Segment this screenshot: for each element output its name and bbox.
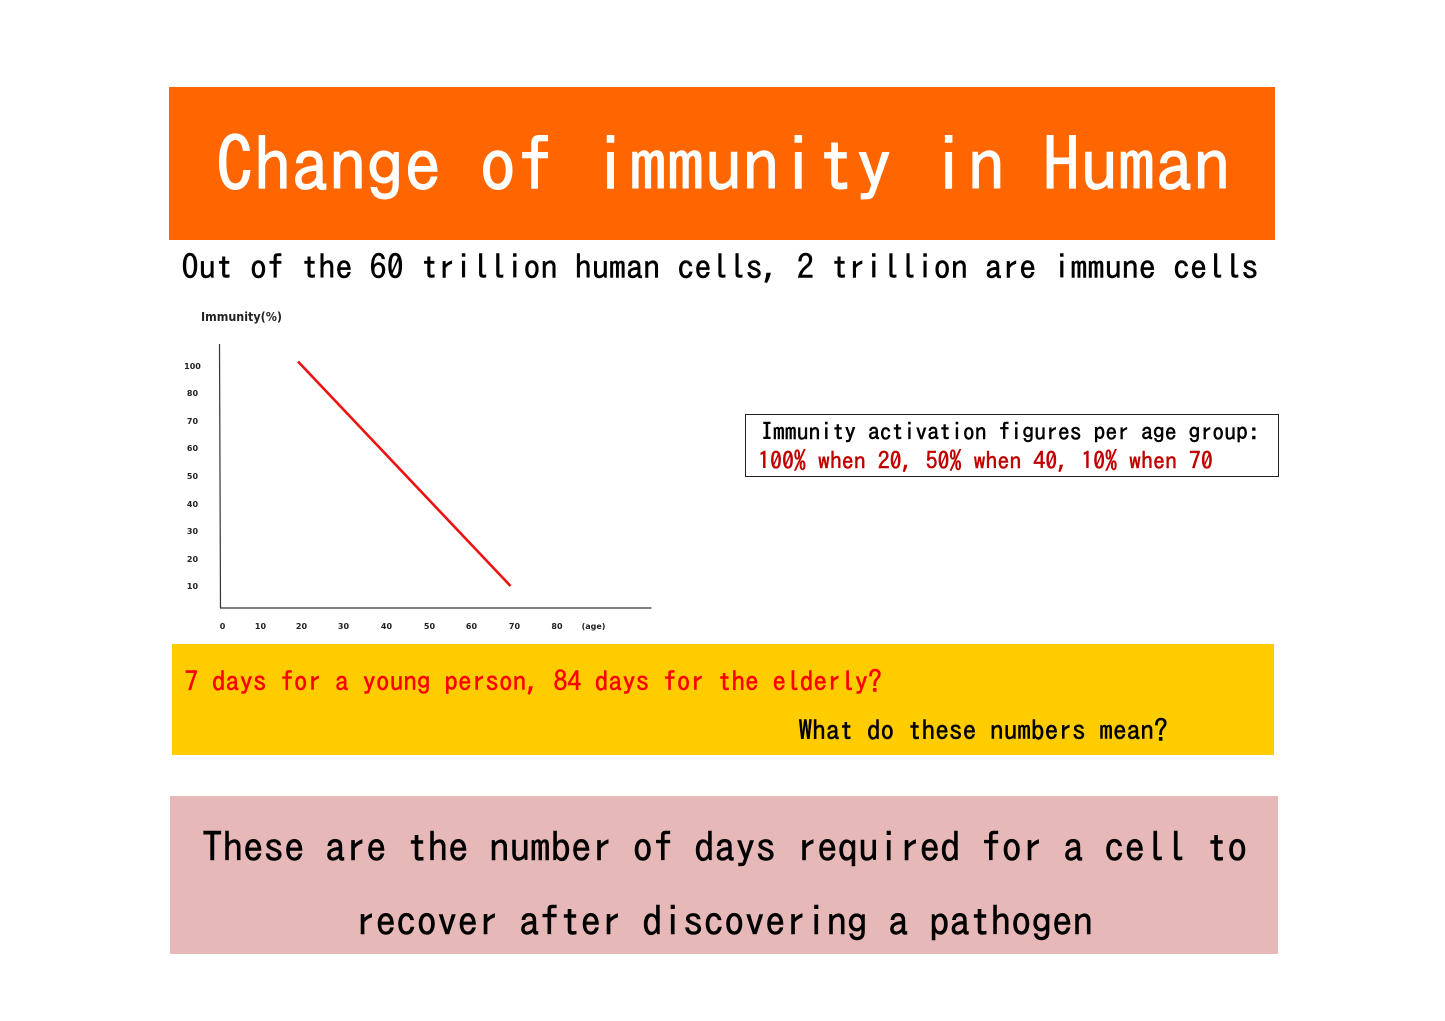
panel: answer xyxy=(170,796,1278,954)
question: black text: What do these numbers mean? xyxy=(798,717,1168,744)
immunity decline line xyxy=(298,362,510,586)
callout: immunity activation figures xyxy=(745,414,1279,477)
x axis labels: 40 xyxy=(381,622,392,631)
x axis labels: 10 xyxy=(255,622,266,631)
answer line one: These are the number of days required for a cell to xyxy=(202,826,1248,867)
question: red text: 7 days for a young person, 84 days for the elderly? xyxy=(184,668,882,695)
y axis labels: 10 xyxy=(187,582,198,591)
answer line two: recover after discovering a pathogen xyxy=(355,900,1093,941)
y axis labels: 100 xyxy=(184,362,201,371)
y axis labels: 60 xyxy=(187,444,198,453)
x axis labels: 20 xyxy=(296,622,307,631)
callout heading: Immunity activation figures per age group: xyxy=(761,419,1260,443)
title banner xyxy=(169,87,1275,240)
y axis labels: 70 xyxy=(187,417,198,426)
x axis labels: 30 xyxy=(338,622,349,631)
subtitle: immune cell count: Out of the 60 trillion human cells, 2 trillion are immune cells xyxy=(182,250,1258,284)
title: Change of immunity in Human xyxy=(216,127,1230,202)
panel: question xyxy=(172,644,1274,755)
x axis labels: 0 xyxy=(220,622,226,631)
y axis labels: 30 xyxy=(187,527,198,536)
x axis labels: 80 xyxy=(551,622,563,631)
y axis title: Immunity(%) xyxy=(201,309,282,324)
x axis labels: 70 xyxy=(509,622,520,631)
y axis labels: 80 xyxy=(187,389,198,398)
line chart: immunity by age xyxy=(184,309,652,631)
y axis labels: 50 xyxy=(187,472,198,481)
x axis labels: (age) xyxy=(582,622,605,631)
x axis labels: 60 xyxy=(466,622,477,631)
axes xyxy=(220,344,652,608)
y axis labels: 40 xyxy=(187,500,198,509)
x axis labels xyxy=(220,622,605,631)
y axis labels: 20 xyxy=(187,555,198,564)
x axis labels: 50 xyxy=(424,622,435,631)
callout figures: 100% when 20, 50% when 40, 10% when 70 xyxy=(758,448,1213,472)
y axis labels xyxy=(184,362,201,591)
